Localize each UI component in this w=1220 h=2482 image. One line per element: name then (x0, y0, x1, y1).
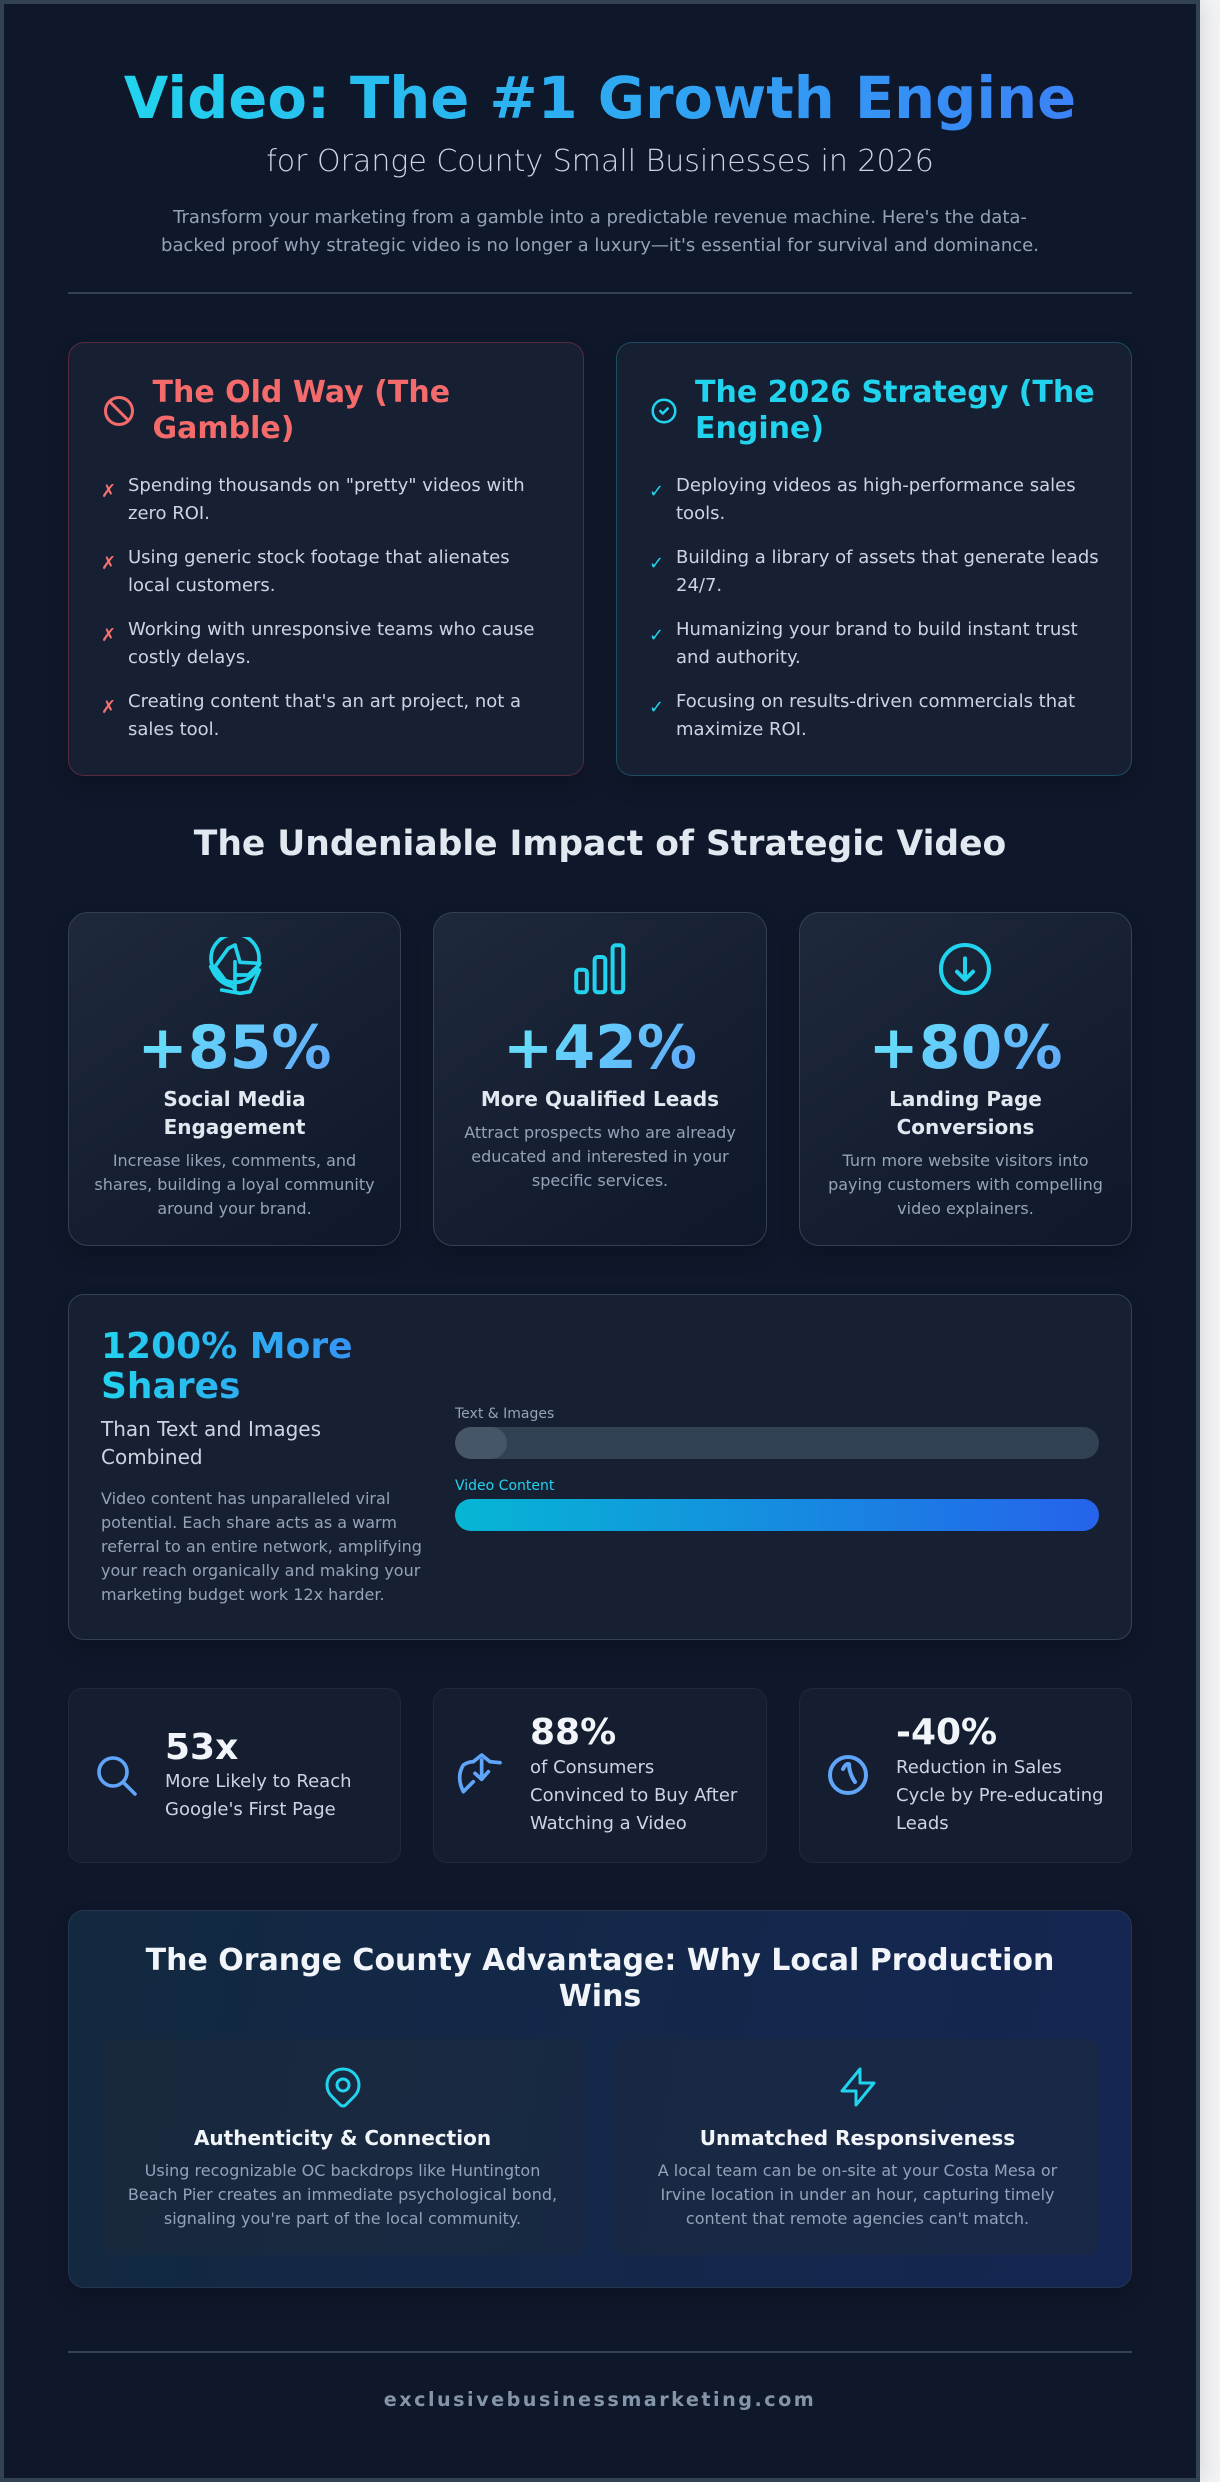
heading: orange county advantage: The Orange County Advantage: Why Local Production (146, 1943, 1054, 1978)
list: old way items: local customers. (128, 575, 276, 596)
bar chart: share comparison (454, 1406, 1099, 1531)
text: Watching a Video (530, 1813, 687, 1834)
description: Attract prospects who are already (464, 1123, 736, 1142)
text: Leads (896, 1813, 949, 1834)
card: authenticity and connection (101, 2039, 584, 2255)
bar: video content (455, 1499, 1099, 1531)
bar label: text and images: Text & Images (455, 1406, 554, 1422)
list: old way items: Spending thousands on "pretty" videos with (128, 475, 525, 496)
description: video explainers. (897, 1199, 1034, 1218)
icon: banned (104, 396, 134, 426)
heading: 1200% more shares (101, 1327, 423, 1407)
heading: old way: The Old Way (The (152, 375, 450, 410)
text (165, 1771, 352, 1820)
card description: A local team can be on-site at your Costa Mesa or (658, 2161, 1057, 2180)
list: strategy items: and authority. (676, 647, 801, 668)
label: More Qualified Leads (481, 1087, 719, 1111)
list: old way items: zero ROI. (128, 503, 210, 524)
description: referral to an entire network, amplifying (101, 1537, 422, 1556)
description: marketing budget work 12x harder. (101, 1585, 385, 1604)
mini stat: 53x (68, 1688, 401, 1863)
list: strategy items: Humanizing your brand to build instant trust (676, 619, 1078, 640)
icon: lightning bolt (840, 2068, 876, 2106)
list: old way items: Creating content that's an art project, not a (128, 691, 521, 712)
description: shares, building a loyal community (94, 1175, 375, 1194)
panel: the old way (68, 342, 584, 776)
description (94, 1151, 375, 1218)
stat: +80%: +80% (869, 1013, 1062, 1083)
stat card: more qualified leads (433, 912, 767, 1246)
description (101, 1489, 422, 1604)
text: Reduction in Sales (896, 1757, 1062, 1778)
text (530, 1757, 738, 1834)
description: Turn more website visitors into (842, 1151, 1088, 1170)
icon: map pin (326, 2068, 360, 2108)
list: old way items: costly delays. (128, 647, 251, 668)
panel: the 2026 strategy (616, 342, 1132, 776)
subtitle: for Orange County Small Businesses in 2026 (266, 144, 934, 179)
list: old way items: ✗ (101, 625, 116, 646)
description: potential. Each share acts as a warm (101, 1513, 397, 1532)
description: educated and interested in your (471, 1147, 729, 1166)
card description: content that remote agencies can't match. (686, 2209, 1029, 2228)
panel: orange county advantage (68, 1910, 1132, 2288)
list: old way items: ✗ (101, 553, 116, 574)
text: Google's First Page (165, 1799, 336, 1820)
description: Increase likes, comments, and (113, 1151, 356, 1170)
icon: check circle (652, 398, 676, 424)
icon: bar chart (574, 943, 626, 994)
mini stat: -40% (799, 1688, 1132, 1863)
section heading: impact: The Undeniable Impact of Strategic Video (194, 824, 1006, 864)
list: strategy items: Building a library of assets that generate leads (676, 547, 1099, 568)
list: strategy items: 24/7. (676, 575, 722, 596)
list: strategy items: ✓ (649, 697, 664, 718)
icon: broken download arrow (458, 1753, 502, 1794)
list: old way items: ✗ (101, 697, 116, 718)
list: strategy items: tools. (676, 503, 725, 524)
description: specific services. (532, 1171, 668, 1190)
list: strategy items: ✓ (649, 481, 664, 502)
description: your reach organically and making your (101, 1561, 420, 1580)
intro text (161, 207, 1039, 256)
intro text: backed proof why strategic video is no longer a luxury—it's essential for survival and dominance. (161, 235, 1039, 256)
list: strategy items: Deploying videos as high-performance sales (676, 475, 1076, 496)
icon: arrow down circle (939, 943, 991, 995)
number: 53x (165, 1727, 238, 1768)
list: old way items: Using generic stock footage that alienates (128, 547, 510, 568)
list: strategy items (649, 475, 1099, 740)
heading: 2026 strategy (695, 375, 1095, 446)
description: Video content has unparalleled viral (101, 1489, 390, 1508)
label: Landing Page (889, 1087, 1042, 1111)
panel: 1200% more shares (68, 1294, 1132, 1640)
text: Convinced to Buy After (530, 1785, 737, 1806)
heading: 2026 strategy: The 2026 Strategy (The (695, 375, 1095, 410)
footer url: exclusivebusinessmarketing.com (384, 2388, 816, 2411)
stat card: landing page conversions (799, 912, 1132, 1246)
stat: +85%: +85% (138, 1013, 331, 1083)
list: old way items (101, 475, 534, 740)
number: -40% (896, 1712, 997, 1753)
list: old way items: sales tool. (128, 719, 219, 740)
label (889, 1087, 1042, 1139)
icon: globe (208, 937, 262, 996)
subheading: Than Text and Images (101, 1417, 321, 1441)
description (828, 1151, 1103, 1218)
icon: search (97, 1756, 137, 1796)
description (464, 1123, 736, 1190)
heading: 1200% more shares: 1200% More (101, 1326, 353, 1367)
card: unmatched responsiveness (616, 2039, 1099, 2255)
card description (128, 2161, 557, 2228)
heading: 2026 strategy: Engine) (695, 411, 824, 446)
list: strategy items: Focusing on results-driven commercials that (676, 691, 1075, 712)
label (163, 1087, 306, 1139)
bar label: video content: Video Content (455, 1478, 554, 1494)
heading: old way (152, 375, 450, 446)
subheading: Combined (101, 1445, 203, 1469)
heading: old way: Gamble) (152, 411, 294, 446)
stat card: social media engagement (68, 912, 401, 1246)
list: strategy items: ✓ (649, 553, 664, 574)
card description: Beach Pier creates an immediate psychological bond, (128, 2185, 557, 2204)
bar: text and images (455, 1427, 1099, 1459)
heading: orange county advantage (146, 1943, 1054, 2014)
card description: signaling you're part of the local community. (164, 2209, 521, 2228)
list: old way items: ✗ (101, 481, 116, 502)
card description: Using recognizable OC backdrops like Huntington (145, 2161, 540, 2180)
subheading (100, 1417, 321, 1469)
list: strategy items: ✓ (649, 625, 664, 646)
title: Video: The #1 Growth Engine (124, 65, 1076, 132)
stat: +42%: +42% (503, 1013, 697, 1083)
card heading: Unmatched Responsiveness (700, 2126, 1015, 2150)
card description: Irvine location in under an hour, capturing timely (661, 2185, 1054, 2204)
mini stat: 88% (433, 1688, 767, 1863)
card description (658, 2161, 1058, 2228)
description: around your brand. (157, 1199, 312, 1218)
list: strategy items: maximize ROI. (676, 719, 807, 740)
label: Social Media (163, 1087, 306, 1111)
description: paying customers with compelling (828, 1175, 1103, 1194)
heading: 1200% more shares: Shares (101, 1366, 240, 1407)
heading: orange county advantage: Wins (559, 1979, 641, 2014)
number: 88% (530, 1712, 616, 1753)
label: Engagement (164, 1115, 305, 1139)
icon: clock (828, 1755, 868, 1795)
intro text: Transform your marketing from a gamble into a predictable revenue machine. Here's the data- (173, 207, 1027, 228)
text (896, 1757, 1104, 1834)
list: old way items: Working with unresponsive teams who cause (128, 619, 534, 640)
text: More Likely to Reach (165, 1771, 352, 1792)
text: Cycle by Pre-educating (896, 1785, 1104, 1806)
card heading: Authenticity & Connection (194, 2126, 491, 2150)
label: Conversions (897, 1115, 1034, 1139)
text: of Consumers (530, 1757, 654, 1778)
